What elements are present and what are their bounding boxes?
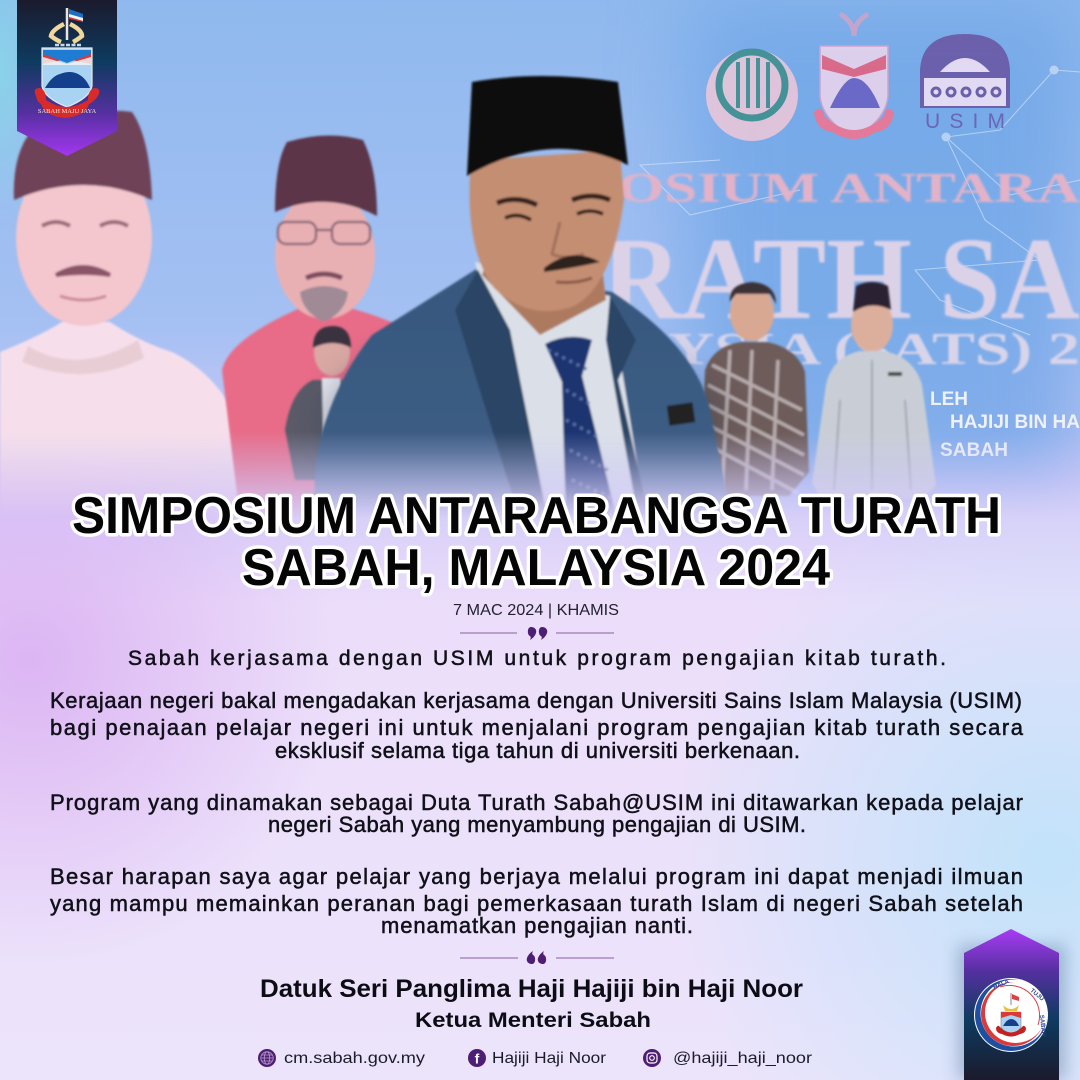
soft shade behind main figure [320,348,730,442]
footer: facebook: Hajiji Haji Noor [492,1050,607,1067]
photo: man in silver shirt [812,282,936,499]
constellation lines [640,66,1080,335]
screen small text [931,392,1080,456]
screen small text: LEH [930,389,968,410]
speaker name: Datuk Seri Panglima Haji Hajiji bin Haji Noor [260,975,803,1003]
logo: USIM: USIM [925,110,1005,133]
screen heading text: YSIA (SATS) 2 [668,323,1080,374]
title [72,487,1001,597]
icon: closing quote marks [527,951,546,964]
title: SABAH, MALAYSIA 2024 [242,539,830,597]
round emblem: TUJU [1029,988,1045,1003]
logo: USIM [920,34,1010,133]
ribbon shadow [958,945,1066,1080]
paragraph 1: bagi penajaan pelajar negeri ini untuk menjalani program pengajian kitab turath secara [50,715,1024,740]
songkok [14,111,152,200]
screen small text: HAJIJI BIN HA [950,412,1080,433]
paragraph 3: Besar harapan saya agar pelajar yang berjaya melalui program ini dapat menjadi ilmuan [50,864,1023,889]
ribbon: Hala Tuju badge bottom right [964,929,1059,1080]
name badge [667,402,695,426]
icon: opening quote marks [528,627,547,640]
subheading: Sabah kerjasama dengan USIM untuk program pengajian kitab turath. [128,647,946,670]
title: SIMPOSIUM ANTARABANGSA TURATH [72,487,1001,545]
ribbon: Sabah crest top left [17,0,117,156]
shield [42,48,92,107]
screen heading text [602,166,1080,374]
photo: small man behind [285,326,355,480]
footer: instagram [643,1049,813,1067]
paragraph 3: menamatkan pengajian nanti. [381,913,693,938]
paragraph 1: Kerajaan negeri bakal mengadakan kerjasama dengan Universiti Sains Islam Malaysia (USIM) [50,688,1022,713]
speaker role: Ketua Menteri Sabah [415,1009,651,1032]
icon: instagram [643,1049,661,1067]
logo: Sabah crest on screen [814,14,894,139]
photo: second faded man in red [220,134,394,512]
shirt [474,262,638,510]
screen heading text: OSIUM ANTARA [618,166,1080,212]
songkok [467,76,628,176]
tie [544,335,614,514]
paragraph 1: eksklusif selama tiga tahun di universiti berkenaan. [275,738,800,763]
face [14,183,154,326]
paragraph 3 [50,864,1023,938]
flag [67,8,83,40]
round emblem: SABAH [1038,1015,1046,1036]
photo: main figure [314,76,734,530]
photo: backdrop stage screen [602,0,1080,520]
scroll motto: SABAH MAJU JAYA [38,108,96,115]
body [0,320,236,496]
footer: instagram: @hajiji_haji_noor [673,1050,813,1067]
lapels [455,270,548,520]
opening quote divider [460,627,614,640]
photo: left faded man [0,109,236,496]
round emblem: HALA [993,979,1011,991]
icon: globe [258,1049,276,1067]
round emblem [974,978,1048,1052]
paragraph 2: Program yang dinamakan sebagai Duta Turath Sabah@USIM ini ditawarkan kepada pelajar [50,790,1023,815]
photo: man in batik [701,282,809,496]
face [470,150,624,311]
paragraph 1 [50,688,1024,763]
logo: round green emblem [706,49,798,141]
crest arms [51,24,82,42]
screen small text: SABAH [940,440,1008,461]
photo collage [0,0,1080,530]
footer: website: cm.sabah.gov.my [284,1050,425,1067]
closing quote divider [460,951,614,964]
paragraph 3: yang mampu memainkan peranan bagi pemerkasaan turath Islam di negeri Sabah setelah [50,891,1023,916]
paragraph 2: negeri Sabah yang menyambung pengajian di USIM. [268,812,806,837]
icon: facebook: f [475,1050,480,1066]
scroll motto [35,88,99,118]
facial features [42,222,128,226]
neck [480,270,608,336]
date: 7 MAC 2024 | KHAMIS [453,602,619,619]
suit [314,268,734,530]
paragraph 2 [50,790,1023,837]
